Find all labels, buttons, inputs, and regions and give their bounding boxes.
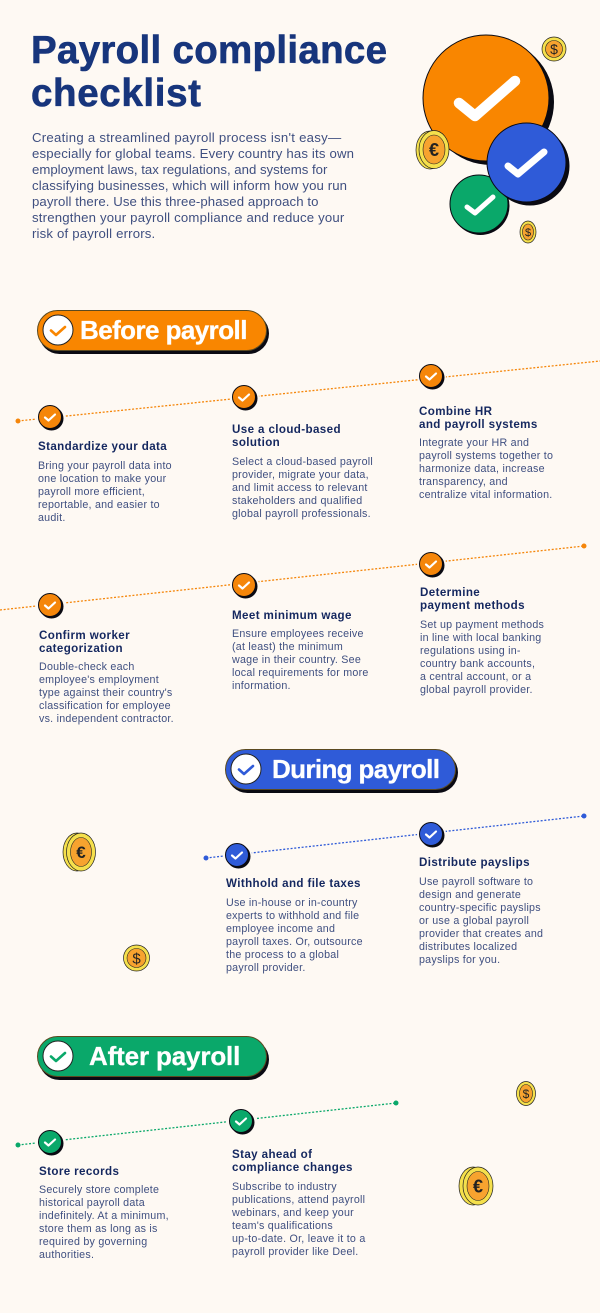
step: confirm worker categorization: vs. independent contractor. (39, 713, 174, 725)
step: confirm worker categorization: type against their country's (39, 687, 173, 699)
step: determine payment methods: global payroll provider. (420, 684, 533, 696)
step: combine HR and payroll systems: payroll systems together to (419, 450, 553, 462)
icon: coin euro after (459, 1167, 493, 1205)
icon: step checks orange (36, 362, 446, 620)
timeline: during payroll (204, 814, 586, 860)
icon: coin dollar top: $ (550, 41, 558, 57)
intro text: especially for global teams. Every country has its own (32, 146, 354, 161)
step: use a cloud-based solution: solution (232, 436, 280, 449)
step: meet minimum wage: wage in their country. See (232, 654, 361, 666)
step: stay ahead of compliance changes: up-to-date. Or, leave it to a (232, 1233, 366, 1245)
step: combine HR and payroll systems: transparency, and (419, 476, 508, 488)
step: confirm worker categorization: Confirm worker (39, 629, 130, 642)
step: withhold and file taxes: experts to withhold and file (226, 910, 359, 922)
step: store records: indefinitely. At a minimum, (39, 1210, 169, 1222)
step: confirm worker categorization: Double-check each (39, 661, 135, 673)
step: withhold and file taxes (226, 877, 363, 974)
step: distribute payslips (419, 856, 543, 966)
step: standardize your data: one location to make your (38, 473, 166, 485)
step: standardize your data (38, 440, 172, 524)
title: checklist (31, 72, 202, 115)
icon: coin euro during left (63, 833, 96, 871)
intro text: classifying businesses, which will inform how you run (32, 178, 347, 193)
step: stay ahead of compliance changes: compliance changes (232, 1161, 353, 1174)
icon: coin small dollar hero (520, 221, 536, 243)
step: determine payment methods: payment methods (420, 599, 525, 612)
step: withhold and file taxes: employee income and (226, 923, 335, 935)
heading: after payroll: After payroll (89, 1041, 240, 1071)
step: distribute payslips: distributes localized (419, 941, 517, 953)
step: combine HR and payroll systems: and payroll systems (419, 418, 538, 431)
intro text: Creating a streamlined payroll process isn't easy— (32, 130, 341, 145)
step: distribute payslips: country-specific payslips (419, 902, 541, 914)
step: distribute payslips: payslips for you. (419, 954, 500, 966)
icon: coin euro after: € (473, 1176, 483, 1196)
step: standardize your data: Bring your payroll data into (38, 460, 172, 472)
title: Payroll compliance (31, 29, 387, 72)
step: meet minimum wage: local requirements for more (232, 667, 369, 679)
step: use a cloud-based solution (232, 423, 373, 520)
icon: coin euro during left: € (76, 843, 86, 862)
icon: coin dollar during: $ (132, 950, 141, 968)
step: standardize your data: payroll more efficient, (38, 486, 145, 498)
step: determine payment methods: regulations using in- (420, 645, 521, 657)
step: withhold and file taxes: Withhold and file taxes (226, 877, 361, 890)
icon: coin euro left of hero (416, 130, 449, 169)
step: stay ahead of compliance changes (232, 1148, 366, 1258)
step: store records (39, 1165, 169, 1261)
heading: before payroll: Before payroll (80, 315, 247, 345)
step: meet minimum wage: Ensure employees receive (232, 628, 364, 640)
icon: coin small dollar after (516, 1082, 536, 1106)
heading: during payroll: During payroll (272, 754, 439, 784)
step: withhold and file taxes: the process to a global (226, 949, 339, 961)
step: distribute payslips: or use a global payroll (419, 915, 529, 927)
intro text: payroll there. Use this three-phased approach to (32, 194, 319, 209)
step: stay ahead of compliance changes: Subscribe to industry (232, 1181, 337, 1193)
step: determine payment methods: country bank accounts, (420, 658, 535, 670)
icon: coin euro left of hero: € (429, 140, 439, 160)
step: determine payment methods (420, 586, 544, 696)
step: stay ahead of compliance changes: webinars, and keep your (232, 1207, 354, 1219)
step: confirm worker categorization: employee's employment (39, 674, 159, 686)
step: use a cloud-based solution: provider, migrate your data, (232, 469, 369, 481)
step: withhold and file taxes: payroll taxes. Or, outsource (226, 936, 363, 948)
icon: green check circle (450, 175, 510, 235)
icon: coin small dollar after: $ (523, 1087, 530, 1101)
step: meet minimum wage: Meet minimum wage (232, 609, 352, 622)
step: use a cloud-based solution: Use a cloud-based (232, 423, 341, 436)
step: distribute payslips: Distribute payslips (419, 856, 530, 869)
step: standardize your data: Standardize your data (38, 440, 167, 453)
step: distribute payslips: Use payroll software to (419, 876, 533, 888)
step: determine payment methods: Determine (420, 586, 480, 599)
heading: before payroll (37, 310, 267, 351)
step: meet minimum wage: (at least) the minimum (232, 641, 343, 653)
step: determine payment methods: a central account, or a (420, 671, 531, 683)
step: use a cloud-based solution: global payroll professionals. (232, 508, 371, 520)
step: meet minimum wage (232, 609, 369, 692)
timeline: before payroll row 2 (0, 544, 586, 610)
step: combine HR and payroll systems (419, 405, 553, 501)
step: use a cloud-based solution: Select a cloud-based payroll (232, 456, 373, 468)
step: distribute payslips: design and generate (419, 889, 521, 901)
heading: during payroll (225, 749, 456, 790)
step: determine payment methods: in line with local banking (420, 632, 542, 644)
step: stay ahead of compliance changes: publications, attend payroll (232, 1194, 365, 1206)
step: determine payment methods: Set up payment methods (420, 619, 544, 631)
step: standardize your data: reportable, and easier to (38, 499, 160, 511)
intro text (32, 130, 354, 241)
heading: after payroll (37, 1036, 267, 1077)
timeline: after payroll (16, 1100, 398, 1148)
icon: step checks blue (223, 820, 446, 870)
step: meet minimum wage: information. (232, 680, 291, 692)
step: withhold and file taxes: payroll provider. (226, 962, 306, 974)
icon: orange check circle (423, 35, 554, 165)
step: standardize your data: audit. (38, 512, 66, 524)
step: store records: authorities. (39, 1249, 94, 1261)
step: combine HR and payroll systems: centralize vital information. (419, 489, 552, 501)
step: store records: Store records (39, 1165, 119, 1178)
step: withhold and file taxes: Use in-house or in-country (226, 897, 358, 909)
step: store records: Securely store complete (39, 1184, 159, 1196)
step: combine HR and payroll systems: Integrate your HR and (419, 437, 529, 449)
timeline: before payroll row 1 (16, 361, 600, 424)
step: stay ahead of compliance changes: payroll provider like Deel. (232, 1246, 358, 1258)
step: store records: historical payroll data (39, 1197, 145, 1209)
step: combine HR and payroll systems: harmonize data, increase (419, 463, 545, 475)
step: confirm worker categorization: categorization (39, 642, 123, 655)
step: confirm worker categorization (39, 629, 174, 725)
step: confirm worker categorization: classification for employee (39, 700, 171, 712)
intro text: risk of payroll errors. (32, 226, 155, 241)
intro text: strengthen your payroll compliance and reduce your (32, 210, 344, 225)
icon: blue check circle (487, 123, 570, 206)
intro text: employment laws, tax regulations, and systems for (32, 162, 327, 177)
step: use a cloud-based solution: stakeholders and qualified (232, 495, 362, 507)
step: use a cloud-based solution: and limit access to relevant (232, 482, 368, 494)
icon: coin dollar during (124, 945, 150, 971)
step: stay ahead of compliance changes: Stay ahead of (232, 1148, 312, 1161)
step: store records: store them as long as is (39, 1223, 158, 1235)
step: distribute payslips: provider that creates and (419, 928, 543, 940)
icon: coin small dollar hero: $ (525, 227, 531, 239)
step: stay ahead of compliance changes: team's qualifications (232, 1220, 333, 1232)
step: combine HR and payroll systems: Combine HR (419, 405, 492, 418)
icon: coin dollar top (542, 37, 566, 61)
step: store records: required by governing (39, 1236, 147, 1248)
title (31, 29, 387, 115)
icon: step checks green (36, 1106, 256, 1156)
